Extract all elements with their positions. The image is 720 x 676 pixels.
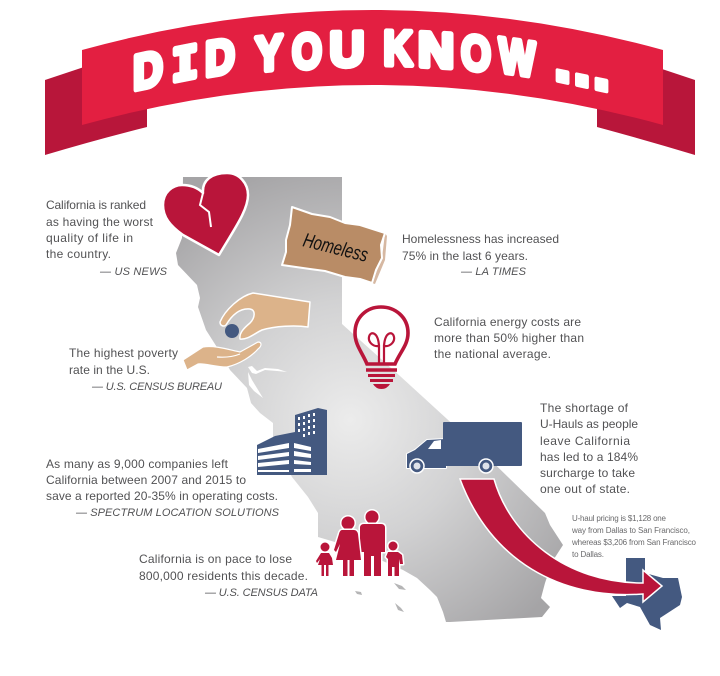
text: poverty: The highest poverty — [69, 346, 178, 360]
heading text: D — [133, 40, 163, 101]
banner left tail — [45, 65, 147, 155]
text: quality of life: quality of life in — [46, 231, 133, 245]
text: energy costs: California energy costs are — [434, 315, 581, 329]
text: homelessness: 75% in the last 6 years. — [402, 249, 528, 263]
text: losing residents: 800,000 residents this decade. — [139, 569, 308, 583]
text: u-haul pricing note: to Dallas. — [572, 550, 604, 559]
icon: broken heart — [163, 173, 248, 255]
text: companies leaving: As many as 9,000 companies left — [46, 457, 229, 471]
heading text: ... — [553, 17, 611, 107]
heading text: N — [418, 23, 454, 79]
text: companies leaving: California between 2007 and 2015 to — [46, 473, 246, 487]
text: quality of life — [46, 198, 168, 278]
text: energy costs: the national average. — [434, 347, 551, 361]
heading text: O — [461, 25, 491, 82]
text: quality of life: — US NEWS — [99, 266, 168, 278]
icon: light bulb — [355, 307, 408, 389]
icon: homeless cardboard sign — [282, 207, 387, 284]
heading text — [133, 17, 611, 107]
san francisco bay — [248, 366, 287, 398]
heading text: K — [383, 21, 413, 76]
banner: did you know — [45, 10, 695, 155]
lower hand — [183, 342, 261, 370]
text: u-haul pricing note — [571, 514, 697, 559]
text: losing residents: — U.S. CENSUS DATA — [204, 587, 318, 599]
icon: texas — [612, 558, 682, 630]
girl — [316, 542, 333, 576]
text: homelessness — [402, 232, 559, 278]
heading text: W — [499, 28, 535, 88]
heading text: O — [292, 24, 322, 80]
arrow: california to texas — [460, 479, 662, 602]
text: u-haul shortage: leave California — [540, 434, 630, 448]
man — [360, 510, 385, 576]
heading text: U — [330, 22, 364, 77]
icon: office buildings — [257, 408, 327, 475]
text: u-haul pricing note: way from Dallas to San Francisco, — [571, 526, 690, 535]
heading text: D — [205, 27, 235, 87]
text: u-haul shortage: one out of state. — [540, 482, 630, 496]
text: poverty — [69, 346, 222, 393]
upper hand — [220, 293, 310, 339]
heading text: I — [172, 37, 198, 97]
text: u-haul pricing note: whereas $3,206 from San Francisco — [571, 538, 697, 547]
text: quality of life: the country. — [46, 247, 111, 261]
california map — [176, 177, 563, 622]
text: u-haul shortage — [540, 401, 638, 496]
coin — [225, 324, 239, 338]
woman — [334, 516, 361, 576]
text: quality of life: California is ranked — [46, 198, 146, 212]
banner right tail — [597, 65, 695, 155]
text: companies leaving: — SPECTRUM LOCATION SOLUTIONS — [75, 507, 280, 519]
text: homelessness: — LA TIMES — [460, 266, 527, 278]
text: poverty: rate in the U.S. — [69, 363, 150, 377]
text: energy costs — [434, 315, 584, 361]
text: losing residents — [139, 552, 318, 599]
text: u-haul shortage: U-Hauls as people — [540, 417, 638, 431]
banner main ribbon — [82, 10, 663, 125]
icon: family — [316, 510, 403, 576]
text: u-haul shortage: surcharge to take — [540, 466, 635, 480]
sign lettering: Homeless — [301, 230, 370, 267]
text: companies leaving: save a reported 20-35% in operating costs. — [46, 489, 278, 503]
text: companies leaving — [46, 457, 280, 519]
text: poverty: — U.S. CENSUS BUREAU — [91, 381, 222, 393]
heading text: Y — [255, 24, 283, 82]
text: energy costs: more than 50% higher than — [434, 331, 584, 345]
text: quality of life: as having the worst — [46, 215, 154, 229]
text: u-haul pricing note: U-haul pricing is $1,128 one — [572, 514, 667, 523]
channel islands — [355, 583, 406, 612]
text: u-haul shortage: has led to a 184% — [540, 450, 638, 464]
text: losing residents: California is on pace to lose — [139, 552, 292, 566]
icon: moving truck — [407, 422, 522, 473]
text: u-haul shortage: The shortage of — [540, 401, 629, 415]
boy — [386, 542, 403, 576]
icon: hands with coin — [183, 293, 310, 370]
text: homelessness: Homelessness has increased — [402, 232, 559, 246]
